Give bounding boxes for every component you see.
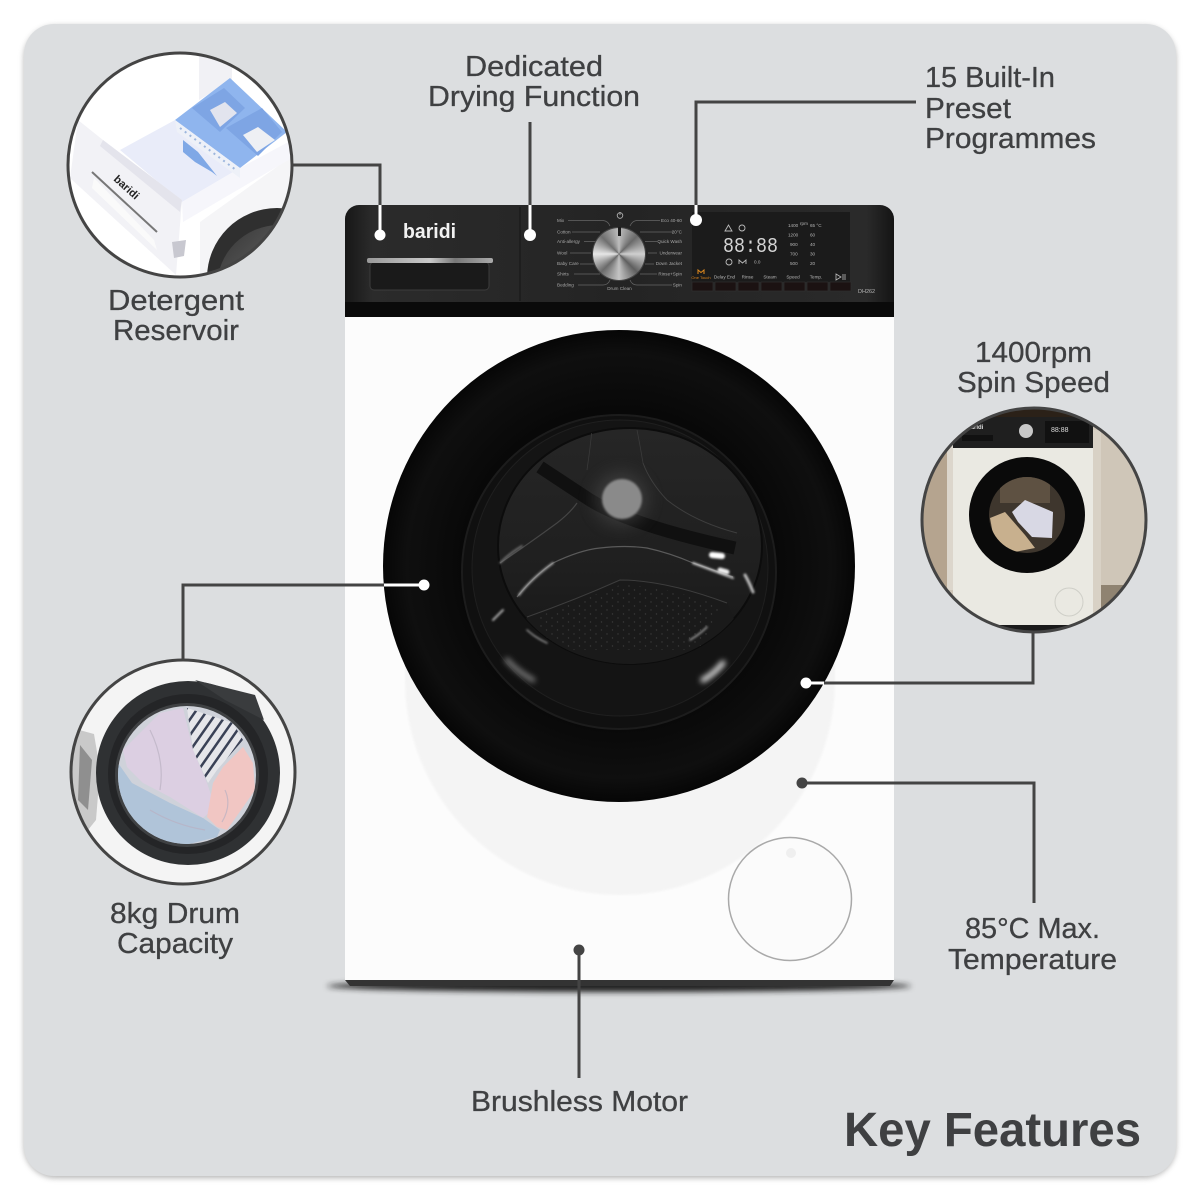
programme labels left [557,218,610,288]
function labels: One Touch [691,275,711,280]
display digits: 88:88 [723,236,778,259]
blue insert [175,78,287,168]
display icons [725,225,746,265]
programme labels right: Spin [673,282,682,288]
display readouts: 700 [790,252,798,256]
display readouts [754,221,822,266]
display readouts: 0.0 [754,260,761,264]
window upper [210,102,237,127]
programme labels right: Rinse+Spin [658,272,682,276]
function labels: Delay End [714,274,736,280]
display readouts: 30 [810,252,816,256]
blue fabric [118,763,220,847]
label: temperature [948,913,1117,976]
display readouts: 900 [790,242,798,247]
icon: knob pointer [618,227,621,236]
inset photo: machine in room [920,400,1151,640]
small control panel [953,417,1093,448]
washing machine [327,205,911,992]
machine body [345,310,894,980]
programme labels right: Down Jacket [656,261,683,266]
cabinet body [200,160,290,274]
floor shadow [327,980,911,992]
programme labels left: Anti-allergy [557,239,581,244]
floor gap [953,625,1093,637]
function buttons [692,282,851,291]
function labels [691,270,845,280]
label: detergent reservoir: Reservoir [113,315,239,347]
programme labels right: Eco 40-60 [661,218,682,223]
pink fabric [207,747,255,830]
drawer brand: baridi [111,173,141,202]
label: preset programmes [925,62,1096,155]
drawer hinge [172,240,186,258]
window lower [243,127,275,152]
heading: key features: Key Features [844,1104,1141,1157]
door seal [96,681,280,865]
display readouts: 40 [810,242,816,247]
icon: selector knob [593,228,645,280]
display readouts: 65 °C [810,223,822,228]
label: preset programmes: 15 Built-In [925,62,1055,94]
leader: drum capacity [183,580,430,660]
programme labels right: Quick Wash [657,239,682,244]
label: drum capacity [110,898,240,960]
drawer grip [92,178,157,250]
filter cover notch [786,848,796,858]
display zone [692,212,850,282]
programme labels left: Cotton [557,230,571,234]
leader: spin speed [800,632,1033,688]
inset photo: detergent drawer [66,52,294,278]
door [383,330,855,802]
function labels: Rinse [742,274,754,280]
label: drum capacity: 8kg Drum [110,898,240,930]
function labels: Speed [786,274,800,280]
glass highlights [493,546,753,680]
small machine body [953,447,1093,625]
label: preset programmes: Preset [925,93,1011,125]
leader: detergent reservoir [292,165,386,240]
drawer rail [182,140,292,222]
drawer tray [120,120,240,202]
small knob [1019,424,1033,438]
label: spin speed: Spin Speed [957,367,1110,399]
small filter cover [1055,588,1083,616]
programme labels right [607,218,683,291]
model number: DH262 [858,289,875,295]
small door [969,457,1085,573]
recess lower [226,108,282,156]
small display [1045,421,1089,443]
label: temperature: 85°C Max. [965,913,1100,945]
leader: temperature [796,778,1034,903]
fabric folds [150,730,228,830]
inset photo: machine in room: 88:88 [1051,427,1069,434]
small brand: baridi [967,425,984,431]
filter cover [728,838,852,960]
open door [72,730,98,830]
washer door gasket [207,208,282,272]
programme labels left: Wool [557,250,567,256]
function labels: Steam [763,274,777,280]
control panel [345,205,894,317]
function labels: Temp. [810,274,822,280]
inset photo: laundry drum [71,660,295,884]
perforated strip [175,120,240,172]
programme labels left: Shirts [557,272,569,276]
label: spin speed [957,337,1110,399]
display readouts: 1400 [788,223,799,228]
label: dedicated drying function: Dedicated [465,51,603,83]
drawer recess [370,262,489,290]
striped shirt [187,708,243,783]
leader: brushless motor [574,944,584,1078]
drawer handle [367,258,493,263]
lilac fabric [123,708,215,818]
programme labels right: 20°C [672,230,683,234]
power icon [617,212,623,218]
label: temperature: Temperature [948,944,1117,976]
label: detergent reservoir [108,285,244,347]
reflected light spot [594,472,648,526]
label: dedicated drying function [428,51,640,113]
programme labels left: Bedding [557,282,574,288]
display readouts: 20 [810,261,816,266]
brand logo: baridi [403,221,456,243]
label: detergent reservoir: Detergent [108,285,244,317]
programme labels right: Drum Clean [607,286,632,291]
drawer grip slot [92,172,157,232]
machine feet [345,980,894,986]
cabinet upright [199,55,232,100]
display readouts: 60 [810,232,816,238]
display readouts: 1200 [788,232,799,238]
programme labels right: Underwear [660,250,682,256]
drum baffle band [540,467,735,548]
display readouts: 500 [790,261,798,266]
drum curve highlight [517,546,733,597]
blue valve [183,140,217,176]
display readouts: rpm [800,221,808,226]
programme labels left: Baby Care [557,261,579,266]
label: drum capacity: Capacity [117,928,234,960]
label: dedicated drying function: Drying Function [428,81,640,113]
door shadow area [405,640,835,895]
leader: dedicated drying [524,122,536,241]
label: spin speed: 1400rpm [975,337,1092,369]
leader: preset programmes [690,102,916,226]
drawer front [70,120,182,275]
drum lower bowl [526,618,734,664]
label: brushless motor: Brushless Motor [471,1086,688,1118]
label: preset programmes: Programmes [925,123,1096,155]
beige clothes [990,512,1035,552]
programme labels left: Mix [557,218,565,223]
recess upper [192,88,245,132]
white clothes [1012,500,1053,538]
